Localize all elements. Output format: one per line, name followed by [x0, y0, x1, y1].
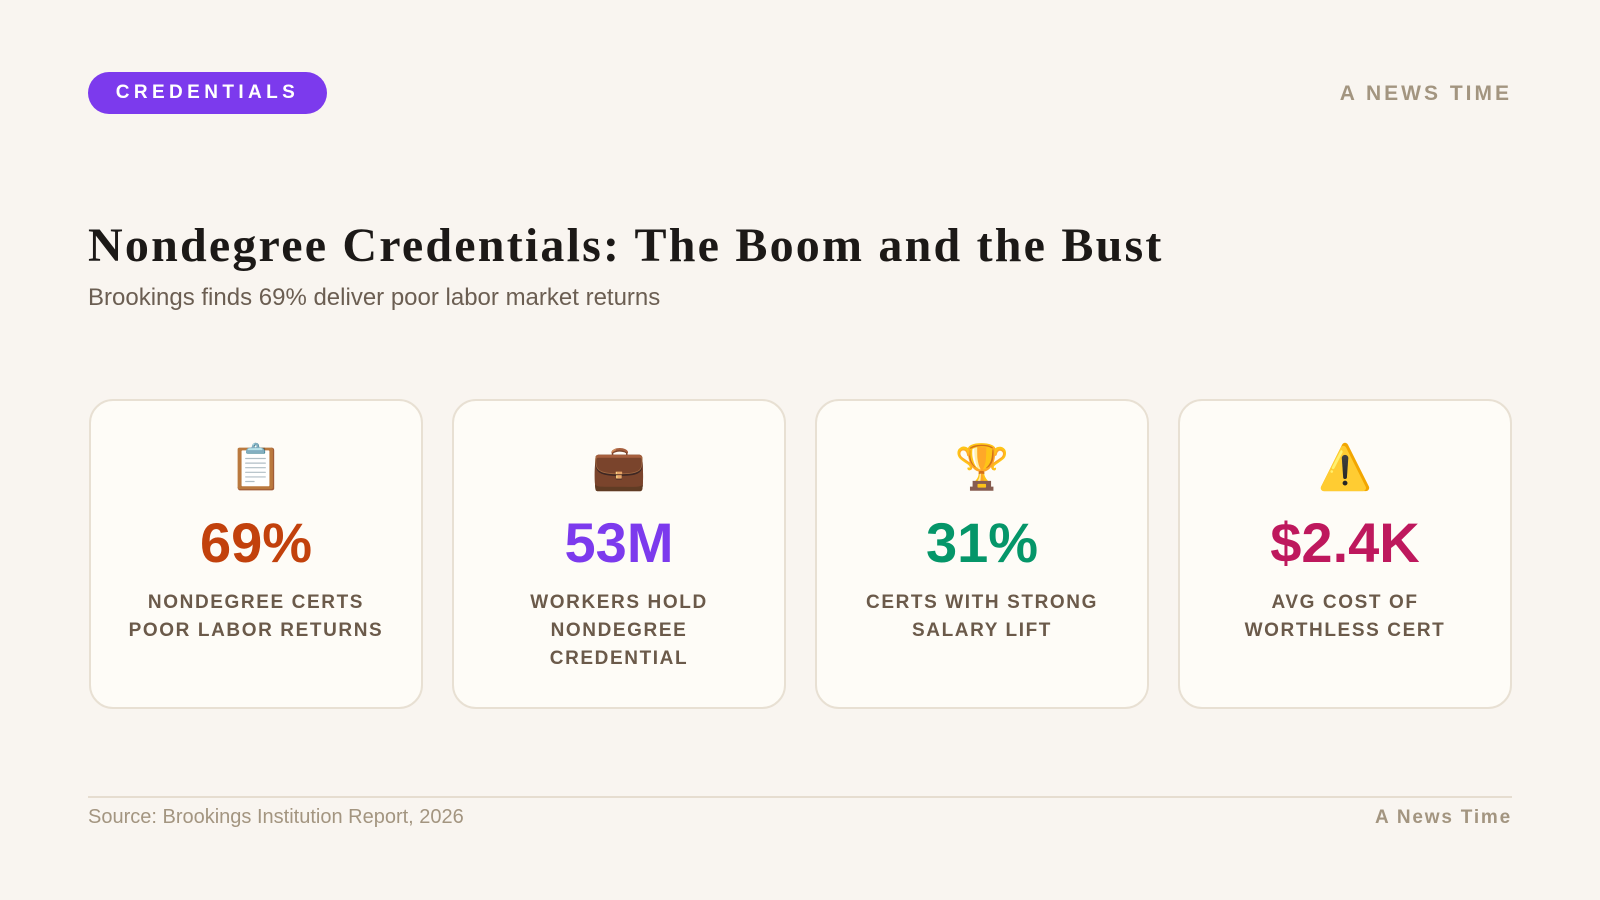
icon: clipboard: 📋 — [229, 442, 283, 493]
stat number: 53M — [565, 511, 673, 574]
stat label: CERTS WITH STRONG SALARY LIFT — [866, 592, 1098, 641]
source note: Source: Brookings Institution Report, 2026 — [88, 806, 464, 828]
icon: briefcase: 💼 — [592, 442, 646, 493]
stat label: NONDEGREE CERTS POOR LABOR RETURNS — [129, 592, 383, 641]
card: 53M — [452, 399, 786, 709]
tag pill — [88, 72, 327, 114]
title: Nondegree Credentials: The Boom and the Bust — [88, 219, 1164, 272]
footer brand: A News Time — [1375, 807, 1512, 828]
stat label: WORKERS HOLD NONDEGREE CREDENTIAL — [530, 592, 708, 669]
brand header: A NEWS TIME — [1340, 82, 1512, 105]
card: 69% — [89, 399, 423, 709]
card: 31% — [815, 399, 1149, 709]
stat number: 31% — [926, 511, 1038, 574]
card: $2.4K — [1178, 399, 1512, 709]
stat number: $2.4K — [1270, 511, 1420, 574]
tag pill: CREDENTIALS — [116, 82, 299, 103]
icon: warning: ⚠️ — [1318, 442, 1372, 493]
stat label: AVG COST OF WORTHLESS CERT — [1245, 592, 1445, 641]
stat number: 69% — [200, 511, 312, 574]
icon: trophy: 🏆 — [955, 442, 1009, 493]
subtitle: Brookings finds 69% deliver poor labor market returns — [88, 284, 660, 311]
